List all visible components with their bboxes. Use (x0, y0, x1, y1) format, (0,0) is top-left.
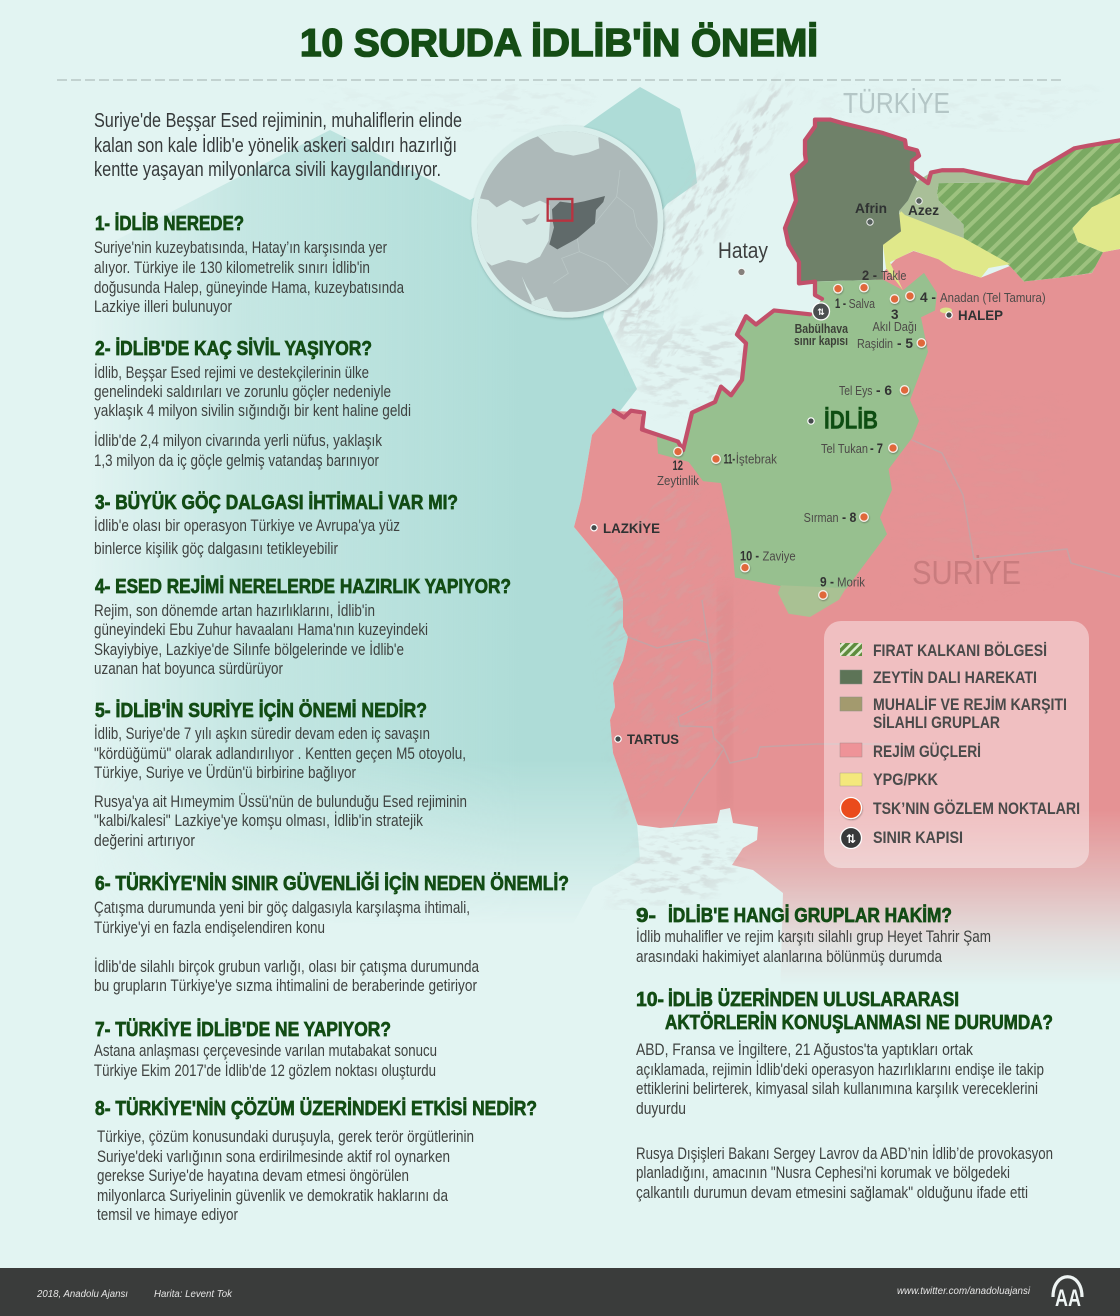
legend: Sinir Kapisi: ⇅ (846, 832, 856, 846)
observation point labels: Salva (849, 296, 876, 311)
section 2: 2- İDLİB'DE KAÇ SİVİL YAŞIYOR? (95, 337, 372, 360)
section 10 (636, 988, 1053, 1202)
observation point labels: Zeytinlik (657, 473, 699, 488)
observation point labels: 9 - (820, 575, 834, 590)
section 1: doğusunda Halep, güneyinde Hama, kuzeybatısında (94, 279, 405, 297)
area: Azez (899, 171, 1013, 238)
observation point labels: İştebrak (736, 452, 777, 466)
section 10: AKTÖRLERİN KONUŞLANMASI NE DURUMDA? (665, 1011, 1053, 1034)
legend: TSK: TSK’NIN GÖZLEM NOKTALARI (873, 799, 1080, 818)
section 4: Rejim, son dönemde artan hazırlıklarını, İdlib'in (94, 601, 375, 620)
observation point labels: 12 (672, 458, 683, 473)
Mediterranean (477, 198, 550, 266)
observation point labels: - 7 (870, 441, 883, 456)
section 5 (94, 699, 467, 850)
border gate: Babulhava: sınır kapısı (794, 334, 848, 348)
section 4: uzanan hat boyunca sürdürüyor (94, 660, 283, 678)
label: Tartus: TARTUS (627, 731, 679, 747)
observation point labels: Akıl Dağı (872, 319, 917, 334)
Black Sea (538, 132, 600, 156)
area: Halep enclave (940, 308, 952, 313)
intro text (94, 110, 462, 181)
legend: TSK (840, 798, 1080, 818)
area: Afrin (785, 120, 919, 283)
area: Firat Kalkani hatched (937, 140, 1120, 282)
map: sea (127, 87, 697, 900)
section 1: alıyor. Türkiye ile 130 kilometrelik sınırı İdlib'in (94, 258, 370, 277)
legend: Firat Kalkani: FIRAT KALKANI BÖLGESİ (873, 641, 1047, 660)
border gate: Babulhava: Babülhava (795, 322, 849, 336)
section 9: 9- (636, 905, 656, 927)
section 10: ABD, Fransa ve İngiltere, 21 Ağustos'ta yaptıkları ortak (636, 1040, 974, 1059)
section 10: duyurdu (636, 1100, 686, 1118)
observation point labels: Anadan (Tel Tamura) (940, 290, 1046, 305)
section 3: 3- BÜYÜK GÖÇ DALGASI İHTİMALİ VAR MI? (95, 491, 458, 514)
area: Morik south (778, 585, 846, 617)
area: YPG/PKK east (1072, 194, 1120, 252)
title: 10 SORUDA İDLİB'İN ÖNEMİ (300, 22, 818, 65)
label: Azez: Azez (908, 202, 939, 218)
observation point labels: Morik (837, 575, 865, 590)
section 1: Suriye'nin kuzeybatısında, Hatay’ın karşısında yer (94, 239, 387, 257)
section 5: "kördüğümü" olarak adlandırılıyor . Kentten geçen M5 otoyolu, (94, 745, 466, 763)
observation point labels (657, 268, 1046, 590)
section 6: Çatışma durumunda yeni bir göç dalgasıyla karşılaşma ihtimali, (94, 899, 470, 917)
area: Idlib (657, 273, 937, 589)
section 10: ettiklerini belirterek, kimyasal silah kullanımına karşılık vereceklerini (636, 1080, 1038, 1098)
logo: AA: AA (1055, 1285, 1081, 1312)
border gate: Babulhava (794, 303, 849, 348)
section 5: 5- İDLİB'İN SURİYE İÇİN ÖNEMİ NEDİR? (95, 699, 427, 722)
section 1: Lazkiye illeri bulunuyor (94, 298, 232, 316)
Syria (549, 196, 605, 249)
section 4 (94, 575, 511, 678)
label: Halep: HALEP (958, 307, 1003, 323)
label: Idlib (808, 406, 878, 434)
observation points (674, 283, 926, 599)
section 8 (95, 1097, 537, 1224)
section 9: arasındaki hakimiyet alanlarına bölünmüş durumda (636, 948, 943, 966)
label: Lazkiye: LAZKİYE (603, 520, 660, 536)
section 4: güneyindeki Ebu Zuhur havaalanı Hama'nın kuzeyindeki (94, 621, 428, 639)
border line (614, 120, 1120, 450)
legend: Zeytin Dali: ZEYTİN DALI HAREKATI (873, 669, 1037, 687)
section 10: 10- (636, 989, 664, 1011)
section 3: binlerce kişilik göç dalgasını tetikleyebilir (94, 540, 338, 558)
section 1 (94, 212, 405, 316)
legend: Muhalif: MUHALİF VE REJİM KARŞITI (873, 696, 1067, 714)
section 5: değerini artırıyor (94, 832, 195, 850)
label: Hatay: Hatay (718, 238, 768, 263)
map: territories (614, 120, 1120, 617)
section 1: 1- İDLİB NEREDE? (95, 212, 244, 235)
section 7: 7- TÜRKİYE İDLİB'DE NE YAPIYOR? (95, 1018, 391, 1041)
label: Türkiye: TÜRKİYE (843, 87, 950, 120)
section 4: 4- ESED REJİMİ NERELERDE HAZIRLIK YAPIYOR? (95, 575, 511, 598)
section 7 (94, 1018, 437, 1080)
section 6: İdlib'de silahlı birçok grubun varlığı, olası bir çatışma durumunda (94, 957, 480, 976)
legend: Rejim: REJİM GÜÇLERİ (873, 742, 981, 761)
section 5: İdlib, Suriye'de 7 yılı aşkın süredir devam eden iç savaşın (94, 724, 430, 743)
observation point labels: Zaviye (762, 548, 796, 564)
section 8: gerekse Suriye'de hayatına devam etmesi öngörülen (97, 1167, 409, 1185)
observation point labels: 4 - (920, 290, 936, 305)
legend panel (824, 621, 1089, 868)
section 6 (94, 871, 569, 995)
section 9: İDLİB'E HANGİ GRUPLAR HAKİM? (668, 904, 952, 927)
section 10: planladığını, amacının "Nusra Cephesi'ni korumak ve bölgedeki (636, 1164, 1010, 1182)
section 7: Türkiye Ekim 2017'de İdlib'de 12 gözlem noktası oluşturdu (94, 1061, 436, 1080)
locator square (548, 199, 572, 221)
footer: 2018, Anadolu Ajansı (36, 1289, 128, 1300)
observation point labels: - 6 (876, 383, 892, 398)
section 10: çalkantılı durumun devam etmesini sağlamak" olduğunu ifade etti (636, 1184, 1028, 1202)
observation point labels: 2 - (862, 268, 877, 283)
Red Sea (522, 276, 535, 302)
observation point labels: Tel Tukan (821, 441, 868, 456)
legend: Muhalif: SİLAHLI GRUPLAR (873, 714, 1000, 732)
section 5: "kalbi/kalesi" Lazkiye'ye komşu olması, İdlib'in stratejik (94, 811, 424, 830)
label: Hatay (718, 238, 768, 276)
section 3 (94, 491, 458, 558)
label: Afrin: Afrin (855, 200, 887, 216)
label: Idlib: İDLİB (824, 406, 878, 434)
intro text: Suriye'de Beşşar Esed rejiminin, muhaliflerin elinde (94, 110, 462, 132)
observation point labels: Raşidin (857, 336, 893, 351)
label: Suriye: SURİYE (912, 554, 1021, 591)
label: Afrin (855, 200, 887, 225)
Cyprus (522, 213, 540, 225)
section 10: İDLİB ÜZERİNDEN ULUSLARARASI (668, 988, 959, 1011)
legend: Sinir Kapisi (840, 828, 963, 848)
observation point labels: Sırman (804, 510, 839, 525)
observation point labels: - 5 (897, 336, 913, 351)
section 8: Türkiye, çözüm konusundaki duruşuyla, gerek terör örgütlerinin (97, 1128, 474, 1146)
section 6: 6- TÜRKİYE'NİN SINIR GÜVENLİĞİ İÇİN NEDEN ÖNEMLİ? (95, 871, 569, 895)
observation point labels: Takle (881, 268, 906, 283)
legend: Rejim (840, 742, 981, 761)
locator globe (467, 123, 663, 318)
section 5: Rusya'ya ait Hımeymim Üssü'nün de bulunduğu Esed rejiminin (94, 793, 467, 811)
footer: Harita: Levent Tok (154, 1289, 233, 1300)
section 2: İdlib, Beşşar Esed rejimi ve destekçilerinin ülke (94, 363, 369, 382)
observation point labels: 3 (891, 307, 899, 322)
section 6: bu grupların Türkiye'ye sızma ihtimalini de beraberinde getiriyor (94, 977, 477, 995)
legend: Firat Kalkani (840, 641, 1047, 660)
section 2: genelindeki saldırıları ve zorunlu göçler nedeniyle (94, 383, 391, 401)
section 3: İdlib'e olası bir operasyon Türkiye ve Avrupa'ya yüz (94, 516, 400, 535)
section 2 (94, 337, 411, 470)
observation point labels: - 8 (842, 510, 857, 525)
map labels (591, 87, 1046, 747)
section 2: 1,3 milyon da iç göçle gelmiş vatandaş barınıyor (94, 452, 379, 470)
footer (0, 1268, 1120, 1316)
border gate: Babulhava: ⇅ (817, 307, 825, 317)
section 5: Türkiye, Suriye ve Ürdün'ü birbirine bağlıyor (94, 764, 356, 782)
observation point labels: 1 - (835, 296, 846, 311)
section 8: milyonlarca Suriyelinin güvenlik ve demokratik haklarını da (97, 1187, 449, 1205)
legend: Muhalif (840, 696, 1067, 732)
section 8: 8- TÜRKİYE'NİN ÇÖZÜM ÜZERİNDEKİ ETKİSİ NEDİR? (95, 1097, 537, 1120)
section 6: Türkiye'yi en fazla endişelendiren konu (94, 919, 325, 937)
section 9: İdlib muhalifler ve rejim karşıtı silahlı grup Heyet Tahrir Şam (636, 927, 991, 946)
observation point labels: Tel Eys (839, 383, 873, 398)
legend: Sinir Kapisi: SINIR KAPISI (873, 829, 963, 847)
observation point labels: 11- (724, 452, 735, 466)
map: hillshade relief (608, 84, 792, 905)
map: regime territory (574, 249, 1120, 968)
observation point labels: 10 - (740, 548, 759, 564)
section 7: Astana anlaşması çerçevesinde varılan mutabakat sonucu (94, 1042, 437, 1060)
section 8: temsil ve himaye ediyor (97, 1206, 238, 1224)
logo: AA (1053, 1277, 1082, 1312)
intro text: kentte yaşayan milyonlarca sivili kaygılandırıyor. (94, 159, 441, 181)
section 9 (636, 904, 991, 966)
section 2: yaklaşık 4 milyon sivilin sığındığı bir kent haline geldi (94, 402, 411, 420)
footer: www.twitter.com/anadoluajansi (897, 1286, 1031, 1297)
legend: YPG/PKK (840, 771, 938, 789)
section 8: Suriye'deki varlığının sona erdirilmesinde aktif rol oynarken (97, 1148, 450, 1166)
Regional borders (553, 170, 657, 285)
section 4: Skayiybiye, Lazkiye'de Silınfe bölgelerinde ve İdlib'e (94, 640, 404, 659)
legend: YPG/PKK: YPG/PKK (873, 771, 938, 789)
intro text: kalan son kale İdlib'e yönelik askeri saldırı hazırlığı (94, 134, 457, 157)
area: YPG/PKK west (883, 211, 1010, 290)
section 2: İdlib'de 2,4 milyon civarında yerli nüfus, yaklaşık (94, 431, 383, 450)
